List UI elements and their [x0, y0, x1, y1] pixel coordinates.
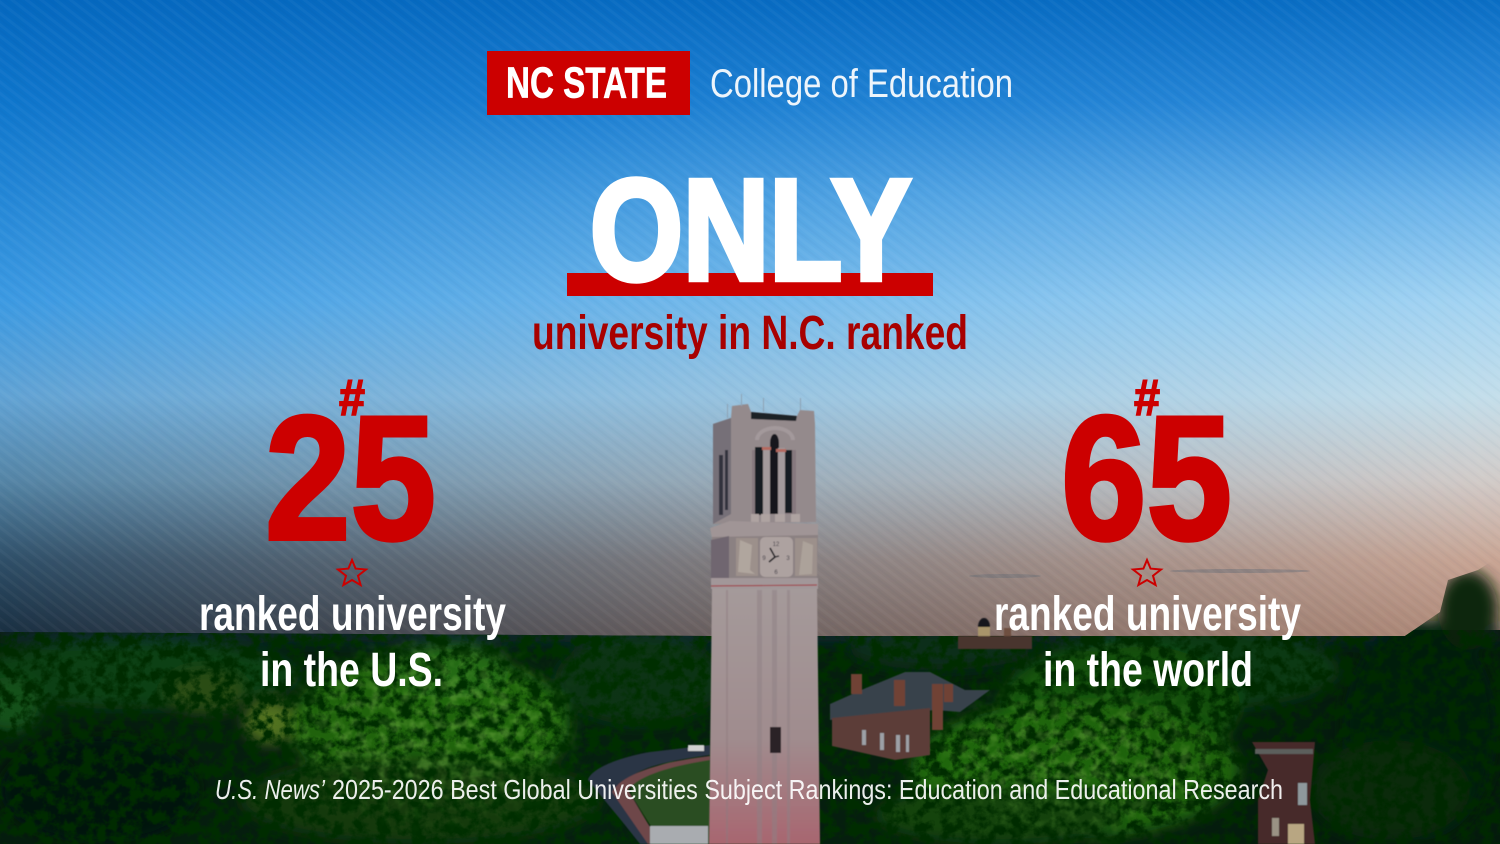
logo: red wordmark box: [487, 51, 690, 115]
tower belfry: [713, 404, 816, 524]
background: brick building at lower right: [1252, 742, 1315, 844]
college name: College of Education: [710, 62, 1013, 106]
logo: red wordmark box: NC STATE: [506, 60, 667, 107]
headline word: ONLY: [590, 150, 911, 310]
hash sign: #: [1134, 369, 1160, 426]
label line one: ranked university: [994, 587, 1301, 641]
stat: #65 in the world: [994, 369, 1301, 697]
tower shaft: [709, 586, 820, 844]
subheading: university in N.C. ranked: [532, 306, 968, 360]
background: lawn and campus road: [588, 745, 710, 844]
clock face: 6: [774, 570, 778, 576]
rank number: 65: [1061, 381, 1232, 577]
stat: #25 in the U.S.: [199, 369, 506, 697]
tower antennae: [727, 394, 801, 418]
icon: star outline: [338, 560, 366, 585]
stripe texture: [0, 0, 1500, 640]
background: domed building on the horizon: [958, 618, 1032, 649]
tower belt course: [710, 521, 818, 538]
source note: U.S. News’: [215, 774, 326, 805]
clock face: 3: [786, 556, 790, 562]
headline underline: [567, 273, 933, 296]
clock face: 12: [773, 542, 780, 548]
rank number: 25: [265, 381, 436, 577]
background: campus tree canopy: [0, 570, 1500, 844]
label line two: in the U.S.: [260, 643, 443, 697]
icon: memorial belltower: [709, 394, 820, 844]
icon: star outline: [1133, 560, 1161, 585]
tower clock stage: [711, 535, 818, 582]
clock face: 9: [762, 556, 766, 562]
background: evening sky: [0, 0, 1500, 640]
background: brick hall behind the tower: [830, 672, 990, 760]
headline: only university in N.C. ranked: [532, 150, 968, 360]
logo: NC State College of Education: [487, 51, 1013, 115]
label line one: ranked university: [199, 587, 506, 641]
clock face: [760, 537, 793, 577]
tower cornice: [711, 578, 818, 589]
source note: 2025-2026 Best Global Universities Subject Rankings: Education and Educational Research: [332, 774, 1283, 805]
label line two: in the world: [1043, 643, 1253, 697]
hash sign: #: [339, 369, 365, 426]
